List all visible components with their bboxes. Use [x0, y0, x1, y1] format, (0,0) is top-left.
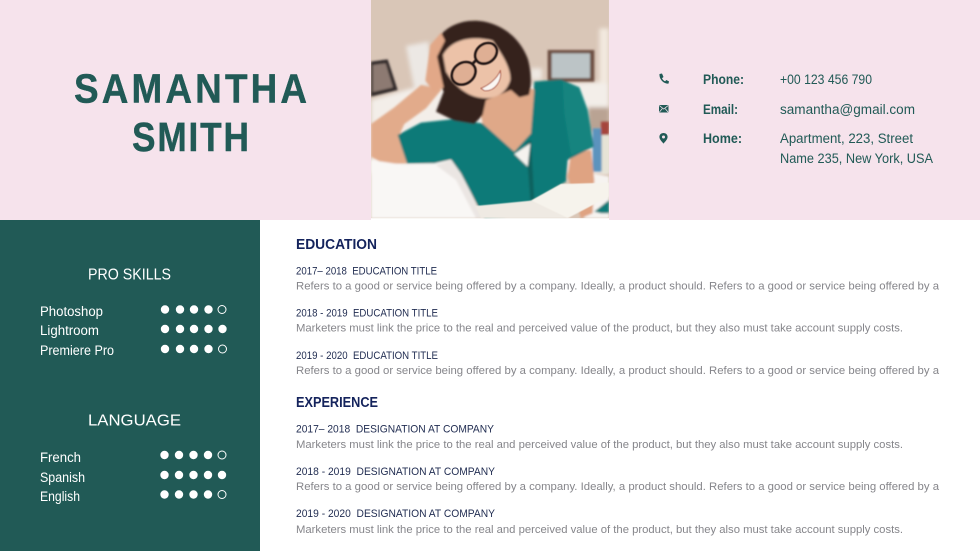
- language: French: French: [40, 450, 81, 465]
- skill: Photoshop: [40, 304, 226, 319]
- contact panel: [609, 0, 980, 220]
- email row: [703, 102, 915, 117]
- education entry 2: [296, 308, 903, 334]
- home row: Name 235, New York, USA: [780, 151, 933, 166]
- glasses: [450, 41, 499, 87]
- experience entry 3: Marketers must link the price to the real and perceived value of the product, but they also must take account supply costs.: [296, 524, 903, 536]
- name: first: SAMANTHA: [74, 67, 307, 112]
- header band: name panel: [0, 0, 371, 220]
- skill: Photoshop: Photoshop: [40, 304, 103, 319]
- panel: education: [296, 237, 940, 377]
- name: last: SMITH: [132, 115, 249, 161]
- experience entry 2: 2018 - 2019 DESIGNATION AT COMPANY: [296, 466, 496, 478]
- phone row: [703, 72, 872, 87]
- phone row: Phone:: [703, 72, 744, 87]
- sidebar panel: [0, 220, 260, 551]
- skill: Lightroom: [40, 323, 227, 338]
- icon: location pin: [659, 133, 668, 144]
- experience entry 1: 2017– 2018 DESIGNATION AT COMPANY: [296, 424, 495, 436]
- email row: Email:: [703, 102, 738, 117]
- education entry 3: Refers to a good or service being offered by a company. Ideally, a product should. Refers to a good or service being offered by a: [296, 365, 940, 377]
- education entry 1: [296, 266, 940, 292]
- education entry 3: [296, 350, 940, 377]
- home row: Apartment, 223, Street: [780, 131, 913, 146]
- email row: samantha@gmail.com: [780, 102, 915, 117]
- skill: Lightroom: Lightroom: [40, 323, 99, 338]
- book: [475, 183, 609, 218]
- language: French: [40, 450, 226, 465]
- hand on hair: [425, 33, 445, 92]
- experience entry 3: 2019 - 2020 DESIGNATION AT COMPANY: [296, 508, 496, 520]
- icon: phone: [659, 74, 669, 84]
- education entry 2: Marketers must link the price to the real and perceived value of the product, but they also must take account supply costs.: [296, 322, 903, 334]
- background shelf and decor: [371, 28, 609, 173]
- skill: Premiere Pro: [40, 343, 226, 358]
- face: [443, 38, 510, 98]
- home row: Home:: [703, 131, 742, 146]
- experience entry 1: [296, 424, 903, 451]
- figure: [371, 21, 609, 218]
- photo: smiling woman with glasses reading a book: [371, 0, 609, 218]
- education entry 1: 2017– 2018 EDUCATION TITLE: [296, 266, 437, 278]
- heading: education: EDUCATION: [296, 237, 377, 253]
- shirt: [398, 79, 594, 218]
- education entry 1: Refers to a good or service being offered by a company. Ideally, a product should. Refers to a good or service being offered by a: [296, 280, 940, 292]
- heading: experience: EXPERIENCE: [296, 395, 378, 411]
- education entry 2: 2018 - 2019 EDUCATION TITLE: [296, 308, 438, 320]
- language: English: [40, 489, 226, 504]
- arm raised to head: [371, 85, 442, 164]
- heading: pro skills: PRO SKILLS: [88, 266, 171, 284]
- icon: envelope: [659, 105, 668, 112]
- language: Spanish: Spanish: [40, 470, 85, 485]
- sofa: [371, 160, 483, 218]
- experience entry 2: Refers to a good or service being offered by a company. Ideally, a product should. Refers to a good or service being offered by a: [296, 481, 940, 493]
- experience entry 2: [296, 466, 940, 493]
- experience entry 1: Marketers must link the price to the real and perceived value of the product, but they also must take account supply costs.: [296, 439, 903, 451]
- skill: Premiere Pro: Premiere Pro: [40, 343, 114, 358]
- right forearm: [568, 150, 594, 218]
- hair: [434, 21, 531, 124]
- home row: [703, 131, 933, 166]
- language: English: English: [40, 489, 80, 504]
- education entry 3: 2019 - 2020 EDUCATION TITLE: [296, 350, 438, 362]
- smile: [481, 71, 501, 91]
- phone row: +00 123 456 790: [780, 72, 872, 87]
- neck and chest: [478, 80, 534, 152]
- panel: experience: [296, 395, 940, 536]
- heading: language: LANGUAGE: [88, 412, 181, 430]
- experience entry 3: [296, 508, 903, 536]
- language: Spanish: [40, 470, 226, 485]
